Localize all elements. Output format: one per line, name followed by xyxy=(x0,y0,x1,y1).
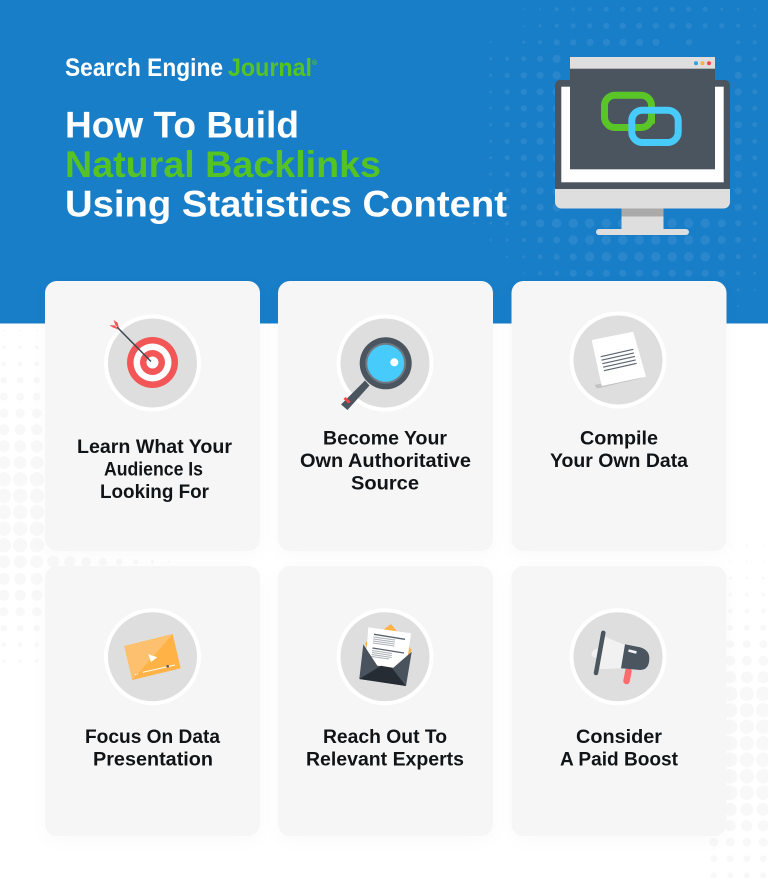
label: Learn What Your xyxy=(77,437,233,458)
card: Become Your Own Authoritative Source xyxy=(278,281,493,551)
logo: Search Engine Journal: Journal xyxy=(228,54,312,82)
icon: desktop monitor with chain link xyxy=(555,57,730,235)
label xyxy=(306,727,464,770)
icon: video player xyxy=(104,608,201,705)
label xyxy=(550,428,688,472)
card: Learn What Your Audience Is Looking For xyxy=(45,281,260,551)
label xyxy=(77,437,233,503)
icon: document xyxy=(570,312,666,408)
label: Own Authoritative xyxy=(300,451,471,472)
label: Your Own Data xyxy=(550,451,688,472)
label: Audience Is xyxy=(104,460,203,480)
label: A Paid Boost xyxy=(560,750,679,770)
logo: Search Engine Journal: ® xyxy=(312,59,318,67)
label xyxy=(300,428,471,494)
title: Using Statistics Content xyxy=(65,184,507,224)
card: Consider A Paid Boost xyxy=(512,566,726,836)
title: Natural Backlinks xyxy=(65,144,381,185)
icon: magnifying glass xyxy=(336,314,434,412)
label xyxy=(85,727,220,770)
icon: megaphone xyxy=(570,608,666,705)
label: Compile xyxy=(580,428,658,450)
logo: Search Engine Journal: Search Engine xyxy=(65,54,223,82)
card: Reach Out To Relevant Experts xyxy=(278,566,493,836)
logo: Search Engine Journal xyxy=(65,54,318,82)
card: Compile Your Own Data xyxy=(512,281,726,551)
label: Source xyxy=(351,474,419,494)
icon: target with arrow xyxy=(104,314,201,412)
icon: open envelope with letter xyxy=(336,608,434,705)
label: Relevant Experts xyxy=(306,750,464,770)
title: How To Build xyxy=(65,104,299,146)
label: Consider xyxy=(576,727,663,748)
label xyxy=(560,727,679,770)
label: Reach Out To xyxy=(323,727,447,748)
label: Looking For xyxy=(100,482,210,503)
label: Focus On Data xyxy=(85,727,220,748)
title xyxy=(65,104,507,224)
label: Become Your xyxy=(323,428,448,450)
card: Focus On Data Presentation xyxy=(45,566,260,836)
label: Presentation xyxy=(93,750,213,770)
